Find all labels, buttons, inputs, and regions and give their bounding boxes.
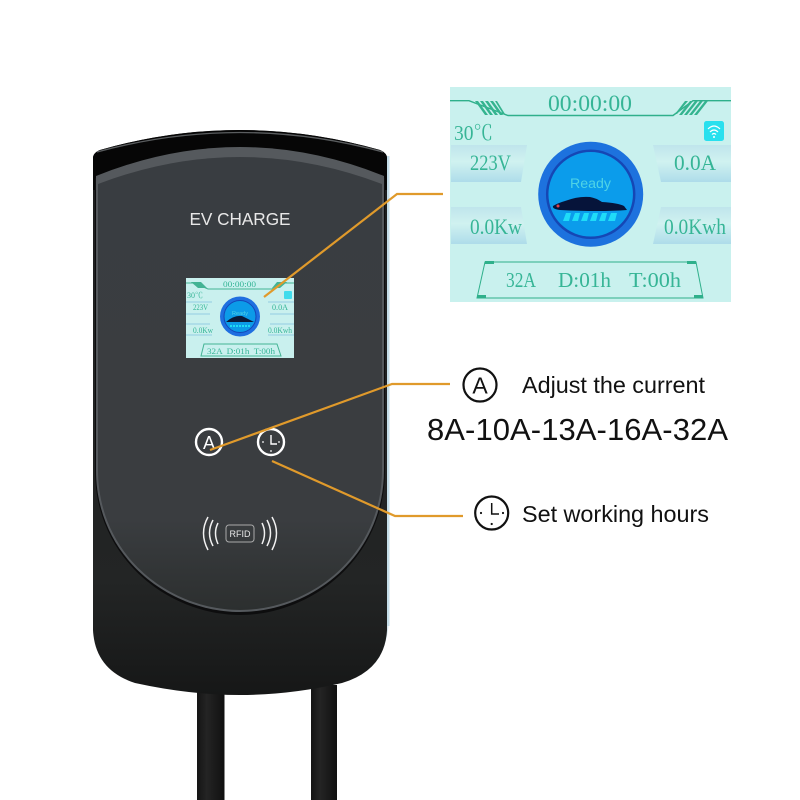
screen header: 00:00:00 [548,91,632,116]
leader line: adjust current [210,384,450,450]
small screen: 0.0Kw [193,326,213,335]
cables [197,685,337,800]
icon: clock [475,496,508,530]
readout: current: 0.0A [674,150,716,175]
settings box [477,261,703,298]
readout: voltage [451,145,527,182]
brand label: EV CHARGE [190,209,290,229]
wifi icon [704,121,724,141]
readout: energy: 0.0Kwh [664,214,726,239]
button: clock [258,429,284,455]
small screen: 223V [193,303,208,312]
RFID symbol: RFID [230,529,251,539]
label: adjust the current: Adjust the current [522,372,706,398]
settings box: D:01h [558,268,612,292]
icon: A: A [472,372,488,398]
readout: power: 0.0Kw [470,214,522,239]
small screen [186,278,294,358]
small screen: 0.0Kwh [268,326,292,335]
current values: 8A-10A-13A-16A-32A [427,412,728,447]
small screen: 00:00:00 [223,280,256,289]
readout: voltage: 223V [470,150,511,175]
button: A [196,429,222,455]
small screen: 0.0A [272,303,288,312]
button: A: A [203,433,215,453]
small screen: Ready [232,311,248,317]
charger body [93,130,390,695]
leader line: screen [264,194,443,297]
face plate [95,147,385,615]
icon: A [464,368,496,402]
settings box: T:00h [629,268,682,292]
label: set working hours: Set working hours [522,501,709,527]
small screen: 32A D:01h T:00h [207,347,275,356]
RFID symbol [204,517,276,550]
large screen panel [450,87,731,302]
readout: energy [653,207,731,244]
readout: power [451,207,527,244]
settings box: 32A [506,268,537,292]
ready gauge [538,142,643,247]
small screen: 30℃ [187,291,203,300]
temperature: 30℃ [454,121,493,145]
leader line: working hours [272,461,463,516]
ready gauge: Ready [570,176,612,192]
screen header [450,91,731,116]
readout: current [653,145,731,182]
